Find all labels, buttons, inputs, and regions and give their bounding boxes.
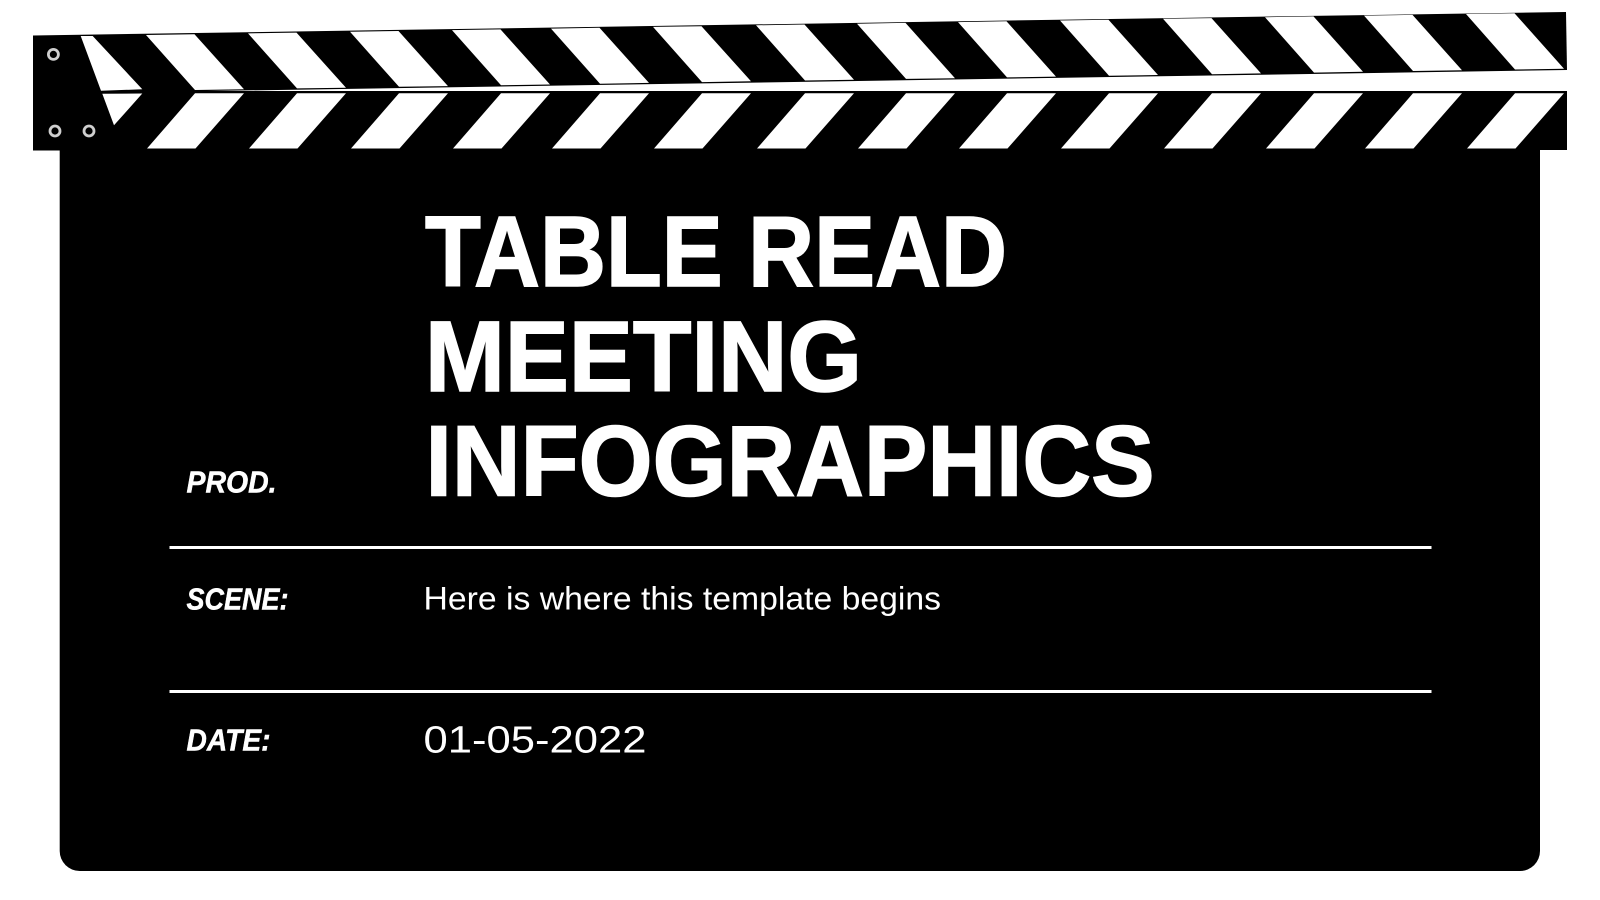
title: TABLE READ [425,196,1007,308]
label: scene: SCENE: [186,581,288,616]
label: prod: PROD. [186,466,276,500]
clapper stick: lower [33,91,1567,150]
divider line: bottom [170,690,1432,693]
date value: 01-05-2022 [424,720,646,762]
icon: hinge rivets [48,49,94,136]
label: date: DATE: [186,724,270,758]
title [425,196,1154,518]
divider line: top [170,546,1432,549]
clapper stick: upper [33,12,1567,93]
scene text: Here is where this template begins [424,580,941,616]
title: MEETING [425,301,862,413]
title: INFOGRAPHICS [426,406,1154,518]
panel: clapperboard body [60,100,1540,871]
